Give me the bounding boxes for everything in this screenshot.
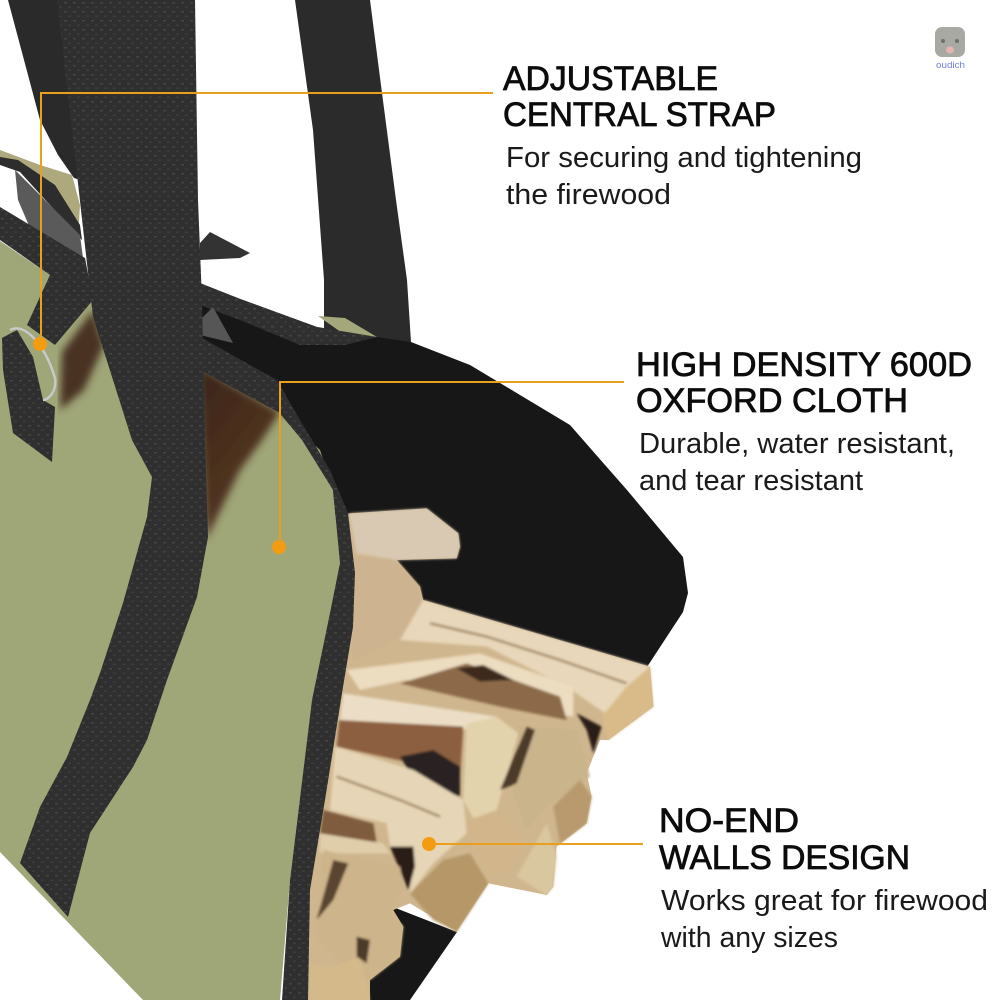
wood logs and end grain bbox=[310, 508, 653, 1000]
callout: high density oxford cloth bbox=[636, 346, 972, 497]
heading: ADJUSTABLE bbox=[503, 60, 718, 98]
green canvas top rim bbox=[0, 150, 80, 240]
description: the firewood bbox=[506, 179, 671, 211]
heading: HIGH DENSITY 600D bbox=[636, 346, 972, 384]
heading: CENTRAL STRAP bbox=[503, 96, 776, 134]
brown shadow on canvas right bbox=[198, 365, 280, 540]
small strap tab bbox=[200, 232, 250, 260]
heading: WALLS DESIGN bbox=[659, 839, 910, 877]
logo: oudich bbox=[935, 27, 965, 71]
logo icon bbox=[935, 27, 965, 57]
brown shadow on canvas left bbox=[60, 310, 104, 410]
product photo: firewood carrier bag bbox=[0, 0, 688, 1000]
green canvas sliver behind rear strap bbox=[318, 316, 377, 337]
main front carrying strap bbox=[20, 0, 208, 917]
description: with any sizes bbox=[660, 922, 838, 954]
diagonal band with buckle strap bbox=[0, 207, 93, 345]
description: For securing and tightening bbox=[506, 142, 862, 174]
top trim left bbox=[0, 157, 82, 240]
callout: adjustable central strap bbox=[503, 60, 862, 211]
rear carrying strap bbox=[295, 0, 411, 342]
leader line: central strap bbox=[33, 93, 493, 351]
strap fold behind front strap bbox=[8, 0, 80, 180]
metal D-ring bbox=[10, 328, 55, 400]
green canvas main panel bbox=[0, 241, 340, 1000]
description: Works great for firewood bbox=[661, 885, 988, 917]
black inner lining bbox=[200, 288, 688, 1000]
description: Durable, water resistant, bbox=[639, 428, 955, 460]
upper rim trim bbox=[200, 283, 377, 345]
grey inner gusset right bbox=[200, 307, 233, 343]
firewood stack bbox=[300, 508, 653, 1000]
leader line: oxford cloth bbox=[272, 382, 624, 554]
diagonal band right bbox=[200, 337, 280, 413]
description: and tear resistant bbox=[639, 465, 863, 497]
callout: no-end walls design bbox=[659, 802, 988, 954]
wood silhouette bbox=[300, 508, 653, 1000]
heading: OXFORD CLOTH bbox=[636, 382, 908, 420]
leader line: no-end walls bbox=[422, 837, 643, 851]
heading: NO-END bbox=[659, 802, 799, 840]
grey inner gusset left bbox=[15, 170, 83, 258]
black edge binding bbox=[277, 380, 355, 1000]
logo wordmark: oudich bbox=[936, 60, 965, 71]
buckle strap tail bbox=[2, 330, 55, 462]
